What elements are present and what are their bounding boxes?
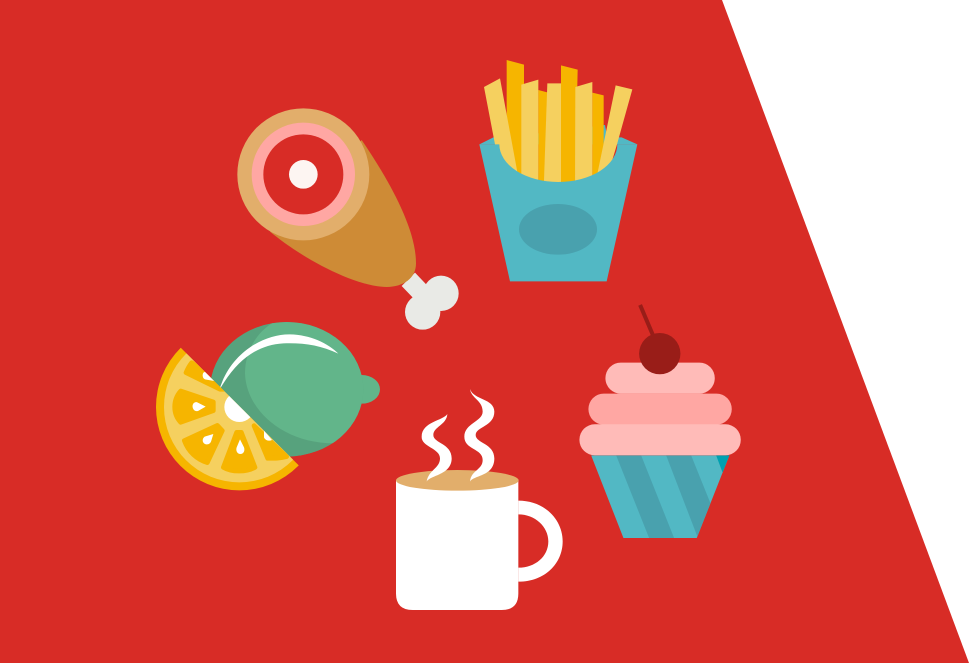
lime highlight [219, 334, 338, 390]
bone centre [289, 160, 318, 189]
box oval label [519, 204, 597, 255]
icon: coffee mug [396, 389, 563, 610]
bone [402, 273, 459, 330]
steam right [464, 389, 494, 482]
icon: french fries [479, 60, 637, 281]
red inner circle [263, 134, 343, 214]
pith [164, 354, 293, 482]
orange slice [156, 348, 299, 490]
frosting middle layer [588, 394, 732, 425]
lime body [211, 322, 362, 456]
coffee surface [396, 470, 519, 491]
rind [156, 348, 299, 490]
box back [479, 125, 637, 144]
cut face of the meat [237, 108, 369, 240]
icon: chicken leg [237, 108, 459, 330]
steam left [422, 414, 452, 482]
box front [479, 144, 637, 281]
fries [484, 60, 632, 190]
cupcake wrapper [591, 455, 730, 538]
cherry [639, 333, 680, 374]
mug body [396, 480, 518, 610]
lime stem nub [343, 375, 380, 404]
orange centre [224, 396, 250, 422]
icon: citrus fruit [156, 310, 380, 490]
cherry stem [640, 305, 653, 336]
pink ring [252, 123, 355, 226]
segment seeds [193, 372, 272, 454]
frosting bottom layer [579, 424, 741, 455]
frosting top layer [605, 363, 715, 394]
segments [175, 363, 287, 471]
mug handle [518, 501, 563, 582]
icon: cupcake [579, 305, 741, 544]
drumstick meat [270, 140, 416, 287]
